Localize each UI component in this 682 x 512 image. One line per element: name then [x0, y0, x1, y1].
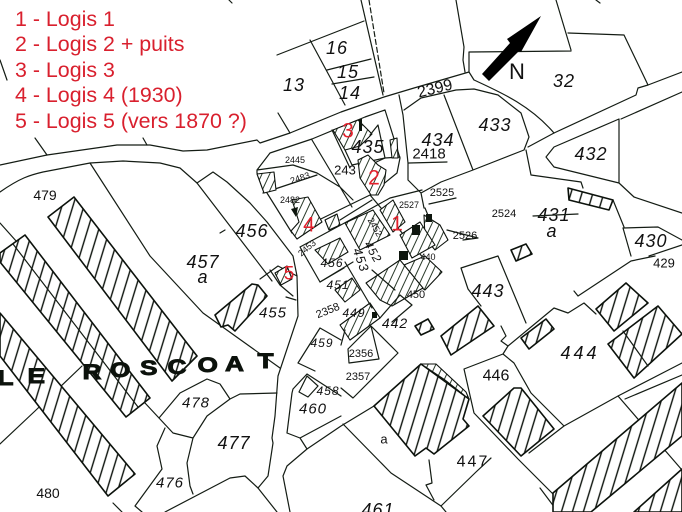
hand-written parcel numbers: 443 — [471, 281, 505, 301]
hand-written parcel numbers: 13 — [283, 75, 305, 95]
hand-written parcel numbers: 478 — [182, 394, 210, 412]
hand-written parcel numbers: 2525 — [430, 187, 454, 199]
building: lower right band — [634, 469, 682, 512]
arrow — [482, 16, 541, 81]
hand-written parcel numbers: 2452 — [366, 216, 384, 238]
hatched buildings — [0, 188, 682, 512]
hand-written parcel numbers: 435 — [351, 137, 385, 157]
hand-written parcel numbers: a — [197, 267, 209, 287]
legend: 4 - Logis 4 (1930) — [15, 83, 183, 107]
legend: 2 - Logis 2 + puits — [15, 32, 184, 56]
red location markers: 3 — [342, 120, 354, 142]
building: 442 small — [415, 319, 434, 335]
hand-written parcel numbers: 2357 — [346, 371, 370, 383]
building: parcel 455 — [215, 284, 267, 331]
logis 5 block — [260, 266, 297, 300]
hand-written parcel numbers: 479 — [33, 187, 57, 203]
2483 block — [257, 172, 276, 193]
north arrow — [482, 16, 541, 84]
building: 443 — [441, 306, 494, 355]
hand-written parcel numbers: a — [546, 221, 558, 241]
village cluster — [257, 119, 448, 397]
north letter: N — [509, 59, 525, 84]
hand-written parcel numbers: 2358 — [314, 301, 342, 321]
red location markers: 1 — [391, 212, 403, 236]
hand-written parcel numbers: 458 — [316, 384, 340, 398]
hand-written parcel numbers: 2356 — [349, 348, 373, 360]
hand-written parcel numbers: 453 — [350, 246, 372, 274]
hand-written parcel numbers: 16 — [326, 38, 348, 58]
hand-written parcel numbers: 446 — [483, 368, 509, 384]
logis 3 block — [333, 119, 398, 165]
building: small 431 annex — [511, 244, 532, 261]
building: 444 north — [596, 283, 648, 331]
building: road band — [553, 383, 682, 512]
red location markers: 2 — [368, 166, 380, 190]
hand-written parcel numbers: 434 — [421, 130, 455, 150]
legend — [15, 7, 247, 133]
logis 2 block — [358, 155, 386, 195]
hand-written parcel numbers: 459 — [310, 336, 334, 350]
hand-written parcel numbers: 429 — [653, 256, 675, 270]
458 block — [299, 376, 318, 397]
hand-written parcel numbers: 431 — [537, 205, 571, 225]
hand-written parcel numbers: 430 — [634, 231, 668, 251]
legend: 5 - Logis 5 (vers 1870 ?) — [15, 109, 247, 133]
hand-written parcel numbers: 15 — [337, 62, 359, 82]
building: long block south — [0, 313, 135, 496]
hand-written parcel numbers: 456 — [235, 221, 269, 241]
place name: LE ROSCOAT: LEROSCOAT — [0, 349, 274, 390]
hand-written parcel numbers: 457 — [186, 252, 220, 272]
building: 431 — [568, 188, 613, 210]
hand-written parcel numbers: 2445 — [285, 155, 305, 165]
legend: 1 - Logis 1 — [15, 7, 115, 31]
hand-written parcel numbers: 2399 — [416, 76, 454, 102]
building: double long block — [0, 235, 150, 417]
hand-written parcel numbers: 442 — [382, 315, 408, 331]
logis 4 block — [291, 197, 340, 239]
red location markers: 4 — [303, 214, 315, 236]
strike through 431 — [533, 214, 578, 216]
red location markers — [284, 120, 403, 284]
hand-written parcel numbers: 2524 — [492, 208, 516, 220]
southern cluster — [315, 238, 442, 345]
building: 446 — [483, 388, 554, 456]
building: 444 small — [521, 319, 554, 349]
hand-written parcel numbers: 450 — [407, 289, 425, 301]
building: a — [374, 364, 469, 456]
hand-written parcel numbers: 2527 — [399, 200, 419, 210]
hand-written parcel numbers: 2482 — [280, 195, 300, 205]
hand-written parcel numbers: 460 — [299, 400, 327, 418]
legend: 3 - Logis 3 — [15, 58, 115, 82]
hand-written parcel numbers: 14 — [339, 83, 361, 103]
red location markers: 5 — [284, 264, 294, 284]
hand-written parcel numbers: 2453 — [296, 238, 318, 258]
hand-written parcel numbers: 476 — [156, 474, 184, 492]
hand-written parcel numbers: 243 — [334, 162, 356, 178]
hand-written parcel numbers: 480 — [36, 485, 60, 501]
hand-written parcel numbers: 477 — [217, 433, 251, 453]
hand-written parcel numbers: 440 — [420, 252, 436, 262]
hand-written parcel numbers: 2418 — [412, 146, 446, 162]
hand-written parcel numbers: 456 — [320, 256, 344, 270]
hand-written parcel numbers: 433 — [478, 115, 512, 135]
hand-written parcel numbers: 444 — [560, 343, 600, 363]
hand-written parcel numbers: 447 — [457, 454, 489, 470]
hand-written parcel numbers: a — [380, 432, 388, 446]
logis 1 block — [345, 200, 448, 260]
hand-written parcel numbers: 2526 — [453, 230, 477, 242]
hand-written parcel numbers: 432 — [574, 144, 608, 164]
hand-written parcel numbers: 32 — [553, 71, 575, 91]
hand-written parcel numbers: 2483 — [289, 170, 311, 186]
hand-written parcel numbers: 452 — [361, 239, 385, 265]
building: long block north — [48, 197, 197, 381]
hand-written parcel numbers: 449 — [342, 306, 366, 320]
hand-written parcel numbers: 451 — [326, 278, 350, 292]
hand-written parcel numbers: 455 — [259, 304, 287, 322]
building: 444 south — [608, 306, 682, 378]
